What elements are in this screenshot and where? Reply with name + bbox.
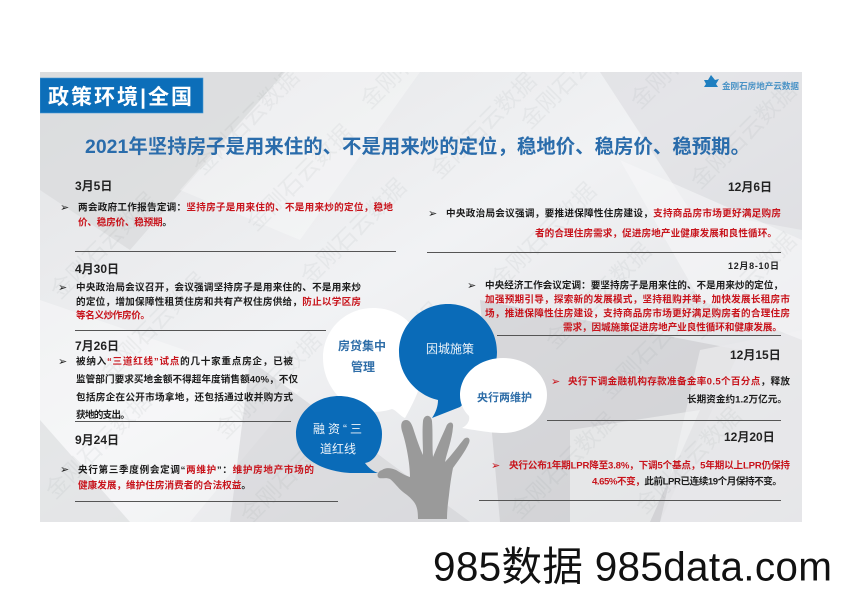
arrow: ➢	[60, 463, 69, 476]
text: 央行第三季度例会定调“两维护”：维护房地产市场的	[78, 464, 314, 476]
item: 12月20日	[479, 430, 790, 500]
speech bubble: 融资“三道红线: 道红线	[320, 441, 356, 456]
item: 12月6日	[427, 180, 781, 252]
text: 两会政府工作报告定调：坚持房子是用来住的、不是用来炒的定位，稳地	[78, 202, 393, 214]
watermarks: 金刚石云数据	[595, 288, 711, 404]
item: 3月5日	[60, 179, 396, 252]
watermarks: 金刚石云数据	[95, 268, 211, 384]
item: 3月5日: 价、稳房价、稳预期。	[78, 216, 172, 228]
date: 12月20日	[724, 430, 775, 444]
speech bubble: 房贷集中管理: 房贷集中	[338, 338, 386, 353]
main title: 2021年坚持房子是用来住的、不是用来炒的定位，稳地价、稳房价、稳预期。	[85, 135, 750, 158]
speech bubble: 融资“三道红线	[296, 396, 382, 473]
item: 4月30日	[58, 262, 361, 330]
item: 9月24日: 健康发展，维护住房消费者的合法权益。	[78, 480, 251, 492]
date: 7月26日	[75, 339, 119, 353]
item: 12月15日: 长期资金约1.2万亿元。	[687, 394, 787, 406]
text: 中央政治局会议召开，会议强调坚持房子是用来住的、不是用来炒	[76, 282, 361, 294]
watermarks: 金刚石云数据	[45, 188, 161, 304]
item: 7月26日: 获地的支出。	[76, 409, 130, 421]
watermarks: 金刚石云数	[355, 14, 455, 114]
logo text: 金刚石房地产云数据	[722, 80, 799, 91]
watermarks: 金刚石云数据	[485, 178, 601, 294]
speech bubble: 因城施策: 因城施策	[426, 342, 474, 356]
watermarks: 金刚石云数据	[210, 328, 326, 444]
slide background	[40, 72, 802, 522]
item: 7月26日: 监管部门要求买地金额不得超年度销售额40%，不仅	[76, 374, 298, 386]
watermarks: 金刚石云数据	[425, 68, 541, 184]
speech bubble: 因城施策	[399, 304, 497, 418]
watermarks: 金刚石云数据	[241, 120, 357, 236]
text: 央行下调金融机构存款准备金率0.5个百分点，释放	[568, 376, 790, 388]
header tag	[40, 78, 203, 113]
speech bubble: 央行两维护	[460, 358, 547, 433]
text: 中央政治局会议强调，要推进保障性住房建设，支持商品房市场更好满足购房	[446, 208, 781, 220]
header tag: 政策环境|全国	[48, 85, 192, 109]
text: 央行公布1年期LPR降至3.8%，下调5个基点，5年期以上LPR仍保持	[509, 460, 790, 472]
date: 9月24日	[75, 433, 119, 447]
item: 12月15日	[547, 348, 790, 420]
item: 12月8-10日	[467, 261, 790, 336]
watermarks: 金刚石云数据	[188, 64, 304, 180]
arrow: ➢	[551, 375, 560, 388]
slide panel	[40, 72, 802, 522]
arrow: ➢	[58, 281, 67, 294]
date: 4月30日	[75, 262, 119, 276]
item: 4月30日: 等名义炒作房价。	[76, 310, 150, 322]
watermarks: 金刚石云数	[625, 14, 725, 114]
date: 12月8-10日	[728, 261, 779, 271]
item: 12月20日: 4.65%不变，此前LPR已连续19个月保持不变。	[592, 476, 782, 488]
speech bubble: 房贷集中管理: 管理	[351, 359, 375, 374]
footer brand text: 985数据 985data.com	[433, 544, 832, 590]
watermarks: 金刚石云数据	[235, 413, 351, 529]
watermarks: 金刚石云数据	[685, 228, 801, 344]
item: 12月8-10日: 加强预期引导，探索新的发展模式，坚持租购并举，加快发展长租房市	[485, 294, 790, 306]
item: 4月30日: 的定位，增加保障性租赁住房和共有产权住房供给，防止以学区房	[76, 296, 361, 308]
watermarks: 金刚石云数据	[295, 174, 411, 290]
speech bubble: 房贷集中管理	[323, 308, 424, 418]
date: 3月5日	[75, 179, 112, 193]
arrow: ➢	[58, 355, 67, 368]
watermarks: 金刚石云数据	[330, 298, 446, 414]
item: 9月24日	[60, 433, 338, 502]
text: 被纳入“三道红线”试点的几十家重点房企，已被	[76, 356, 293, 368]
icon: diamond logo	[704, 75, 719, 87]
logo	[704, 75, 799, 91]
watermarks: 金刚石云数据	[515, 18, 631, 134]
arrow: ➢	[491, 459, 500, 472]
text: 中央经济工作会议定调：要坚持房子是用来住的、不是用来炒的定位，	[485, 280, 783, 292]
date: 12月6日	[728, 180, 772, 194]
item: 12月8-10日: 场，推进保障性住房建设，支持商品房市场更好满足购房者的合理住房	[485, 308, 790, 320]
watermarks: 金刚石云数据	[685, 78, 801, 194]
date: 12月15日	[730, 348, 781, 362]
icon: hand	[378, 416, 470, 519]
speech bubble: 融资“三道红线: 融资“三	[313, 422, 362, 436]
arrow: ➢	[467, 279, 476, 292]
speech bubble: 央行两维护: 央行两维护	[477, 390, 532, 404]
watermarks: 金刚石云数据	[630, 403, 746, 519]
watermarks: 金刚石云数据	[505, 408, 621, 524]
item: 12月8-10日: 需求，因城施策促进房地产业良性循环和健康发展。	[563, 322, 782, 334]
arrow: ➢	[60, 201, 69, 214]
watermarks: 金刚石云数据	[540, 238, 656, 354]
item: 7月26日: 包括房企在公开市场拿地，还包括通过收并购方式	[76, 392, 293, 404]
item: 12月6日: 者的合理住房需求，促进房地产业健康发展和良性循环。	[535, 228, 777, 240]
arrow: ➢	[428, 207, 437, 220]
item: 7月26日	[58, 339, 298, 422]
watermarks	[48, 72, 798, 522]
watermarks: 金刚石云数据	[40, 388, 156, 504]
